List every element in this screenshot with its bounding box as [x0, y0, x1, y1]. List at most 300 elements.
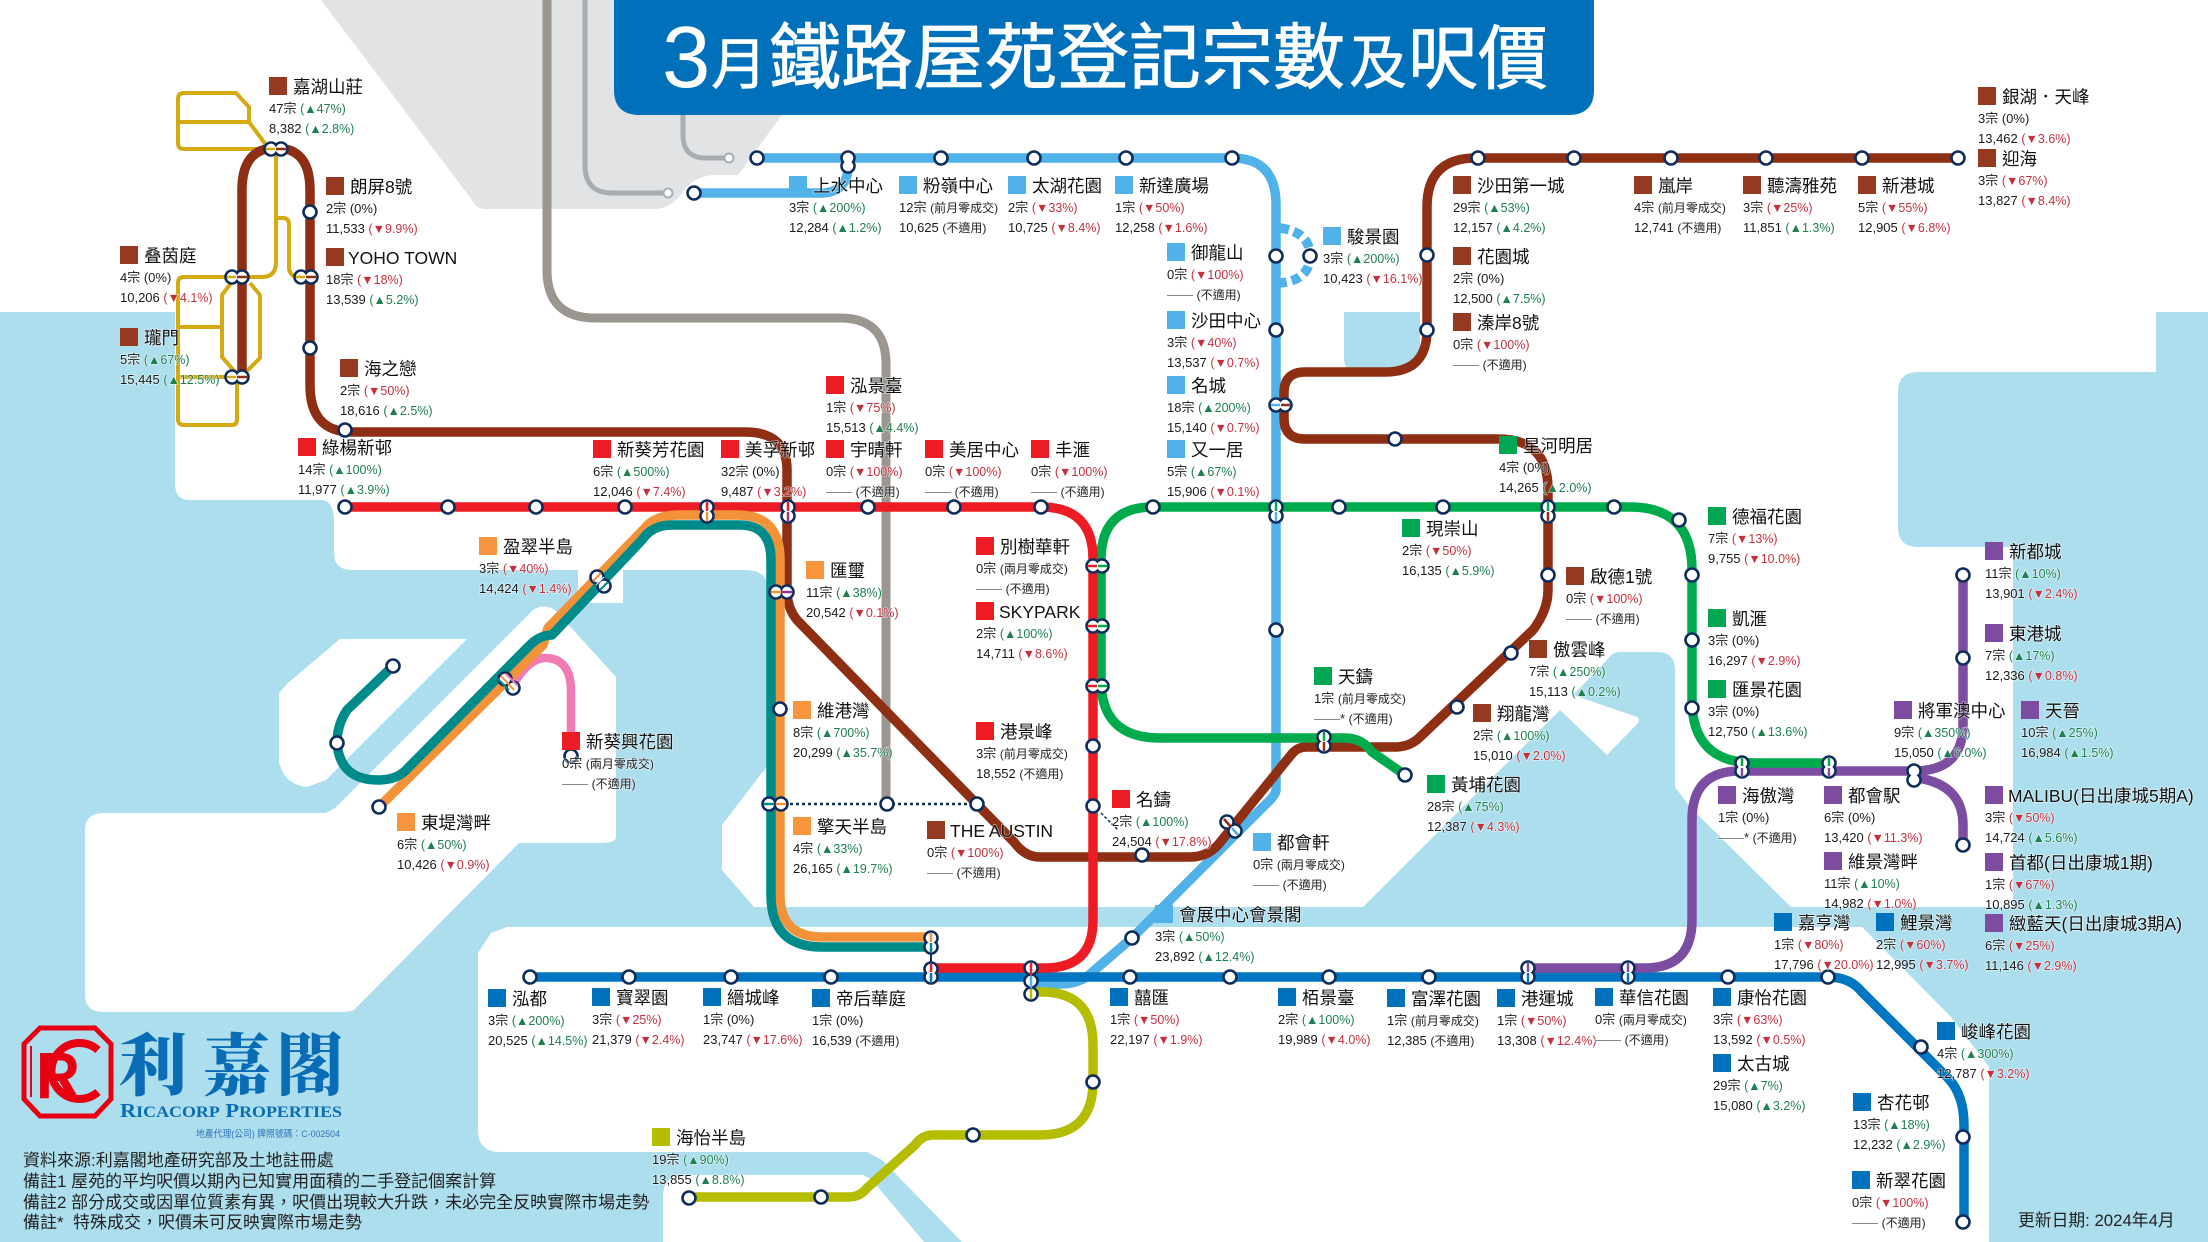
station: 別樹華軒: 0宗 (兩月零成交) — [976, 561, 1068, 576]
station: 星河明居: 星河明居 — [1523, 436, 1593, 456]
station: 都會駅: 13,420 (▼11.3%) — [1824, 830, 1923, 845]
station: 叠茵庭: 10,206 (▼4.1%) — [120, 290, 213, 305]
station: 寶翠園 — [592, 988, 685, 1047]
station: 海之戀: 18,616 (▲2.5%) — [340, 403, 433, 418]
station: 聽濤雅苑: 3宗 (▼25%) — [1743, 200, 1813, 215]
station: 名城: 18宗 (▲200%) — [1167, 400, 1251, 415]
station: 綠楊新邨: 11,977 (▲3.9%) — [298, 482, 390, 497]
station: 迎海: 3宗 (▼67%) — [1978, 173, 2048, 188]
station: 港運城: 13,308 (▼12.4%) — [1497, 1033, 1597, 1048]
station: 新都城: 13,901 (▼2.4%) — [1985, 586, 2078, 601]
station: 叠茵庭 — [120, 246, 213, 305]
station: 翔龍灣: 2宗 (▲100%) — [1473, 728, 1550, 743]
station: 現崇山: 16,135 (▲5.9%) — [1402, 563, 1495, 578]
station: 帝后華庭: 16,539 (不適用) — [812, 1033, 899, 1048]
station: 會展中心會景閣 — [1155, 905, 1302, 964]
line: Tsuen Wan — [345, 507, 1093, 968]
station: 別樹華軒: —— (不適用) — [976, 581, 1050, 596]
station: 御龍山: —— (不適用) — [1167, 287, 1241, 302]
station: 海之戀: 海之戀 — [364, 359, 416, 379]
station: 新達廣場: 12,258 (▼1.6%) — [1115, 220, 1208, 235]
station: 太湖花園: 太湖花園 — [1032, 176, 1102, 196]
station: 天鑄: 1宗 (前月零成交) — [1314, 691, 1406, 706]
station: 緻藍天: 6宗 (▼25%) — [1985, 938, 2055, 953]
station: 海之戀 — [340, 359, 433, 418]
source and footnotes: 備註1 屋苑的平均呎價以期內已知實用面積的二手登記個案計算 — [23, 1171, 496, 1191]
interchange: Yau Tong — [1736, 756, 1748, 778]
station: 匯景花園: 12,750 (▲13.6%) — [1708, 724, 1808, 739]
station: 港景峰 — [976, 722, 1068, 781]
interchange: Austin — [880, 798, 894, 810]
station: 天晉: 16,984 (▲1.5%) — [2021, 745, 2114, 760]
station: 維港灣: 8宗 (▲700%) — [793, 725, 870, 740]
station: 丰滙: —— (不適用) — [1031, 484, 1105, 499]
station: 富澤花園: 1宗 (前月零成交) — [1387, 1013, 1479, 1028]
interchange: Lai King — [700, 500, 714, 522]
interchange: Tuen Mun north — [264, 142, 288, 156]
station: 縉城峰: 縉城峰 — [727, 988, 780, 1008]
station: 栢景臺: 19,989 (▼4.0%) — [1278, 1032, 1371, 1047]
interchange: Central — [924, 962, 938, 984]
station: 粉嶺中心: 粉嶺中心 — [923, 176, 993, 196]
station: 栢景臺: 2宗 (▲100%) — [1278, 1012, 1355, 1027]
station: 黃埔花園: 12,387 (▼4.3%) — [1427, 819, 1520, 834]
station: 凱滙: 凱滙 — [1732, 609, 1767, 629]
station: 華信花園: —— (不適用) — [1595, 1032, 1669, 1047]
station: 會展中心會景閣: 3宗 (▲50%) — [1155, 929, 1225, 944]
station: 丰滙: 0宗 (▼100%) — [1031, 464, 1108, 479]
station: 匯景花園 — [1708, 680, 1808, 739]
station: 啟德1號: —— (不適用) — [1566, 611, 1640, 626]
station: 粉嶺中心: 12宗 (前月零成交) — [899, 200, 998, 215]
station: 名城: 15,140 (▼0.7%) — [1167, 420, 1260, 435]
station: 寶翠園: 3宗 (▼25%) — [592, 1012, 662, 1027]
station: 新達廣場 — [1115, 176, 1209, 235]
station: 嵐岸: 4宗 (前月零成交) — [1634, 200, 1726, 215]
station: 緻藍天: 11,146 (▼2.9%) — [1985, 958, 2077, 973]
station: 宇晴軒: 0宗 (▼100%) — [826, 464, 903, 479]
grey lines — [547, 0, 886, 804]
station: 囍匯 — [1110, 988, 1203, 1047]
station: 德福花園: 7宗 (▼13%) — [1708, 531, 1778, 546]
station: 康怡花園: 康怡花園 — [1737, 988, 1807, 1008]
station: 港運城: 港運城 — [1521, 989, 1574, 1009]
station: 美孚新邨: 美孚新邨 — [745, 440, 815, 460]
small grey terminals — [664, 154, 734, 198]
station: 溱岸8號: —— (不適用) — [1453, 357, 1527, 372]
station: 美孚新邨: 32宗 (0%) — [721, 464, 780, 479]
station: 美居中心: 美居中心 — [949, 440, 1019, 460]
station: MALIBU: 14,724 (▲5.6%) — [1985, 830, 2078, 845]
station: YOHO TOWN — [326, 248, 457, 307]
station: 沙田中心: 沙田中心 — [1191, 311, 1261, 331]
station: 星河明居 — [1499, 436, 1593, 495]
station: 都會駅 — [1824, 786, 1923, 845]
station: 德福花園: 9,755 (▼10.0%) — [1708, 551, 1800, 566]
station: 花園城 — [1453, 247, 1546, 306]
station: 新葵芳花園: 新葵芳花園 — [617, 440, 704, 460]
station: 御龍山 — [1167, 243, 1244, 302]
station: 峻峰花園 — [1937, 1022, 2031, 1081]
station: 天鑄: 天鑄 — [1338, 667, 1373, 687]
station: 綠楊新邨: 綠楊新邨 — [322, 438, 392, 458]
station: 名鑄: 名鑄 — [1136, 790, 1171, 810]
station: MALIBU: 3宗 (▼50%) — [1985, 810, 2055, 825]
station: 港景峰: 18,552 (不適用) — [976, 766, 1063, 781]
station: 天晉 — [2021, 701, 2114, 760]
station: 啟德1號: 啟德1號 — [1590, 567, 1652, 587]
line: Disneyland — [514, 658, 571, 735]
station: 叠茵庭: 叠茵庭 — [144, 246, 196, 266]
station: 海怡半島: 海怡半島 — [676, 1128, 746, 1148]
station: 上水中心: 12,284 (▲1.2%) — [789, 220, 882, 235]
station: 首都: 首都(日出康城1期) — [2009, 853, 2153, 873]
station: 新葵興花園 — [562, 732, 674, 791]
station: 太湖花園: 10,725 (▼8.4%) — [1008, 220, 1101, 235]
station: 鯉景灣 — [1876, 913, 1969, 972]
source and footnotes: 備註* 特殊成交，呎價未可反映實際市場走勢 — [23, 1213, 362, 1232]
station: 新港城: 5宗 (▼55%) — [1858, 200, 1928, 215]
station: 德福花園: 德福花園 — [1732, 507, 1802, 527]
station: 聽濤雅苑: 聽濤雅苑 — [1767, 176, 1837, 196]
water: inland pond — [1344, 312, 1420, 372]
station: 東港城: 12,336 (▼0.8%) — [1985, 668, 2078, 683]
station: 新達廣場: 新達廣場 — [1139, 176, 1209, 196]
station: 鯉景灣: 12,995 (▼3.7%) — [1876, 957, 1969, 972]
railway lines — [242, 148, 1964, 1222]
station: 太古城: 29宗 (▲7%) — [1713, 1078, 1783, 1093]
station: 匯璽 — [806, 561, 899, 620]
station: 新翠花園: 0宗 (▼100%) — [1852, 1195, 1929, 1210]
line: East Rail — [694, 158, 1310, 984]
interchange: Tsing Yi north — [590, 570, 610, 592]
station: 銀湖‧天峰 — [1978, 87, 2090, 146]
station: 東堤灣畔: 6宗 (▲50%) — [397, 837, 467, 852]
interchange: Siu Hong — [226, 270, 248, 284]
station: 富澤花園: 12,385 (不適用) — [1387, 1033, 1474, 1048]
station: 天鑄: ——* (不適用) — [1314, 711, 1393, 726]
station: 維港灣 — [793, 701, 893, 760]
station: 新港城: 新港城 — [1882, 176, 1934, 196]
station: 朗屏8號: 11,533 (▼9.9%) — [326, 221, 418, 236]
title banner: 及 — [1349, 31, 1407, 96]
station: 上水中心 — [789, 176, 883, 235]
station: 迎海: 迎海 — [2002, 149, 2037, 169]
station: 嘉亨灣: 1宗 (▼80%) — [1774, 937, 1844, 952]
station: 囍匯: 1宗 (▼50%) — [1110, 1012, 1180, 1027]
station: 將軍澳中心: 將軍澳中心 — [1918, 701, 2006, 721]
station: 瓏門: 瓏門 — [144, 328, 179, 348]
station: THE AUSTIN — [927, 821, 1053, 880]
station: 現崇山: 2宗 (▼50%) — [1402, 543, 1472, 558]
station: 沙田中心 — [1167, 311, 1261, 370]
station: 帝后華庭: 1宗 (0%) — [812, 1013, 863, 1028]
station: 杏花邨 — [1853, 1093, 1946, 1152]
station: 新葵興花園: —— (不適用) — [562, 776, 636, 791]
station: 維景灣畔: 11宗 (▲10%) — [1824, 876, 1900, 891]
station: 上水中心: 上水中心 — [813, 176, 883, 196]
station: 上水中心: 3宗 (▲200%) — [789, 200, 866, 215]
station: 名城 — [1167, 376, 1260, 435]
station: 凱滙 — [1708, 609, 1801, 668]
interchange: Hong Kong station — [924, 932, 938, 954]
interchange: Tuen Mun — [226, 370, 248, 384]
station: 星河明居: 14,265 (▲2.0%) — [1499, 480, 1592, 495]
station: 擎天半島: 4宗 (▲33%) — [793, 841, 863, 856]
station: 帝后華庭 — [812, 989, 906, 1048]
station: 首都 — [1985, 853, 2153, 912]
interchange: Tseung Kwan O — [1908, 764, 1920, 786]
station: 首都: 10,895 (▲1.3%) — [1985, 897, 2078, 912]
station: 泓景臺: 泓景臺 — [850, 376, 902, 396]
station: 都會軒 — [1253, 833, 1345, 892]
station: 海傲灣: ——* (不適用) — [1718, 830, 1797, 845]
interchange: Sheung Shui — [842, 152, 854, 172]
station: 鯉景灣: 鯉景灣 — [1900, 913, 1952, 933]
station: SKYPARK — [976, 602, 1081, 661]
interchange: Yuen Long — [294, 270, 318, 284]
title banner: 鐵路屋苑登記宗數 — [769, 19, 1345, 99]
station: 杏花邨: 杏花邨 — [1877, 1093, 1930, 1113]
station: 鯉景灣: 2宗 (▼60%) — [1876, 937, 1946, 952]
station: 縉城峰 — [703, 988, 803, 1047]
station: 匯景花園: 3宗 (0%) — [1708, 704, 1759, 719]
station: 栢景臺: 栢景臺 — [1302, 988, 1354, 1008]
station: 銀湖‧天峰: 銀湖．天峰 — [2002, 87, 2090, 107]
station: 盈翠半島: 3宗 (▼40%) — [479, 561, 549, 576]
station: 東堤灣畔: 10,426 (▼0.9%) — [397, 857, 490, 872]
station: 泓景臺 — [826, 376, 919, 435]
station: YOHO TOWN: 13,539 (▲5.2%) — [326, 292, 419, 307]
station: 將軍澳中心 — [1894, 701, 2006, 760]
station: 海怡半島 — [652, 1128, 746, 1187]
station: 都會軒: —— (不適用) — [1253, 877, 1327, 892]
station: 瓏門: 15,445 (▲12.5%) — [120, 372, 220, 387]
station: THE AUSTIN: —— (不適用) — [927, 865, 1001, 880]
station: 朗屏8號 — [326, 177, 418, 236]
station: 現崇山 — [1402, 519, 1495, 578]
station: 康怡花園: 13,592 (▼0.5%) — [1713, 1032, 1806, 1047]
station: 匯景花園: 匯景花園 — [1732, 680, 1802, 700]
logo English name: RICACORP PROPERTIES — [120, 1100, 342, 1122]
station: 海怡半島: 19宗 (▲90%) — [652, 1152, 729, 1167]
station: 德福花園 — [1708, 507, 1802, 566]
station: 粉嶺中心: 10,625 (不適用) — [899, 220, 986, 235]
station: 嘉亨灣 — [1774, 913, 1874, 972]
interchange: Hung Hom — [1220, 816, 1242, 838]
line: Tung Chung — [379, 515, 931, 937]
station: 新葵芳花園: 12,046 (▼7.4%) — [593, 484, 686, 499]
station: SKYPARK: 2宗 (▲100%) — [976, 626, 1053, 641]
station: 泓景臺: 15,513 (▲4.4%) — [826, 420, 919, 435]
station: 翔龍灣: 翔龍灣 — [1497, 704, 1550, 724]
station: 杏花邨: 13宗 (▲18%) — [1853, 1117, 1930, 1132]
link between interchange stations — [930, 950, 932, 962]
station: 港運城: 1宗 (▼50%) — [1497, 1013, 1567, 1028]
station: 嘉湖山莊: 8,382 (▲2.8%) — [269, 121, 354, 136]
station: 嘉湖山莊: 47宗 (▲47%) — [269, 101, 346, 116]
station: 又一居: 又一居 — [1191, 440, 1244, 460]
station: 新都城: 11宗 (▲10%) — [1985, 566, 2061, 581]
interchange: Prince Edward — [1086, 560, 1108, 572]
station: 緻藍天 — [1985, 914, 2182, 973]
station: 都會駅: 都會駅 — [1848, 786, 1900, 806]
station: YOHO TOWN: 18宗 (▼18%) — [326, 272, 403, 287]
station: 富澤花園: 富澤花園 — [1411, 989, 1481, 1009]
station: 天晉: 10宗 (▲25%) — [2021, 725, 2098, 740]
interchange: Kowloon — [762, 798, 788, 810]
station: 別樹華軒: 別樹華軒 — [1000, 537, 1070, 557]
station: 都會軒: 0宗 (兩月零成交) — [1253, 857, 1345, 872]
light rail network — [178, 93, 299, 425]
station: 維景灣畔 — [1824, 852, 1918, 911]
station: 華信花園: 0宗 (兩月零成交) — [1595, 1012, 1687, 1027]
station: SKYPARK: SKYPARK — [999, 602, 1081, 622]
station: 名城: 名城 — [1191, 376, 1226, 396]
station: 現崇山: 現崇山 — [1426, 519, 1478, 539]
station: 名鑄: 2宗 (▲100%) — [1112, 814, 1189, 829]
dashed link at Kowloon — [784, 803, 977, 805]
station: 泓都: 20,525 (▲14.5%) — [488, 1033, 588, 1048]
station: 嘉亨灣: 嘉亨灣 — [1798, 913, 1850, 933]
station: 華信花園: 華信花園 — [1619, 988, 1689, 1008]
station: 囍匯: 22,197 (▼1.9%) — [1110, 1032, 1203, 1047]
station: 海之戀: 2宗 (▼50%) — [340, 383, 410, 398]
station: 翔龍灣: 15,010 (▼2.0%) — [1473, 748, 1566, 763]
station: 維景灣畔: 14,982 (▼1.0%) — [1824, 896, 1917, 911]
interchange: Admiralty — [1024, 962, 1038, 1000]
station: 傲雲峰: 15,113 (▲0.2%) — [1529, 684, 1621, 699]
station: 新都城: 新都城 — [2009, 542, 2062, 562]
station: 太古城 — [1713, 1054, 1806, 1113]
station: 帝后華庭: 帝后華庭 — [836, 989, 906, 1009]
station: 翔龍灣 — [1473, 704, 1566, 763]
station: 擎天半島 — [793, 817, 893, 876]
station: 傲雲峰: 傲雲峰 — [1553, 640, 1606, 660]
station: 擎天半島: 擎天半島 — [817, 817, 887, 837]
station: 匯璽: 11宗 (▲38%) — [806, 585, 882, 600]
station: 新葵芳花園 — [593, 440, 704, 499]
station: MALIBU: MALIBU(日出康城5期A) — [2008, 786, 2194, 806]
station: 擎天半島: 26,165 (▲19.7%) — [793, 861, 893, 876]
station: 東港城 — [1985, 624, 2078, 683]
station: 東堤灣畔: 東堤灣畔 — [421, 813, 491, 833]
interchange: Ho Man Tin — [1318, 730, 1330, 752]
interchange: North Point — [1522, 962, 1534, 984]
station: 名鑄 — [1112, 790, 1212, 849]
station: 迎海 — [1978, 149, 2071, 208]
line: Airport Express — [337, 525, 931, 947]
station: 黃埔花園: 黃埔花園 — [1451, 775, 1521, 795]
station: 港景峰: 3宗 (前月零成交) — [976, 746, 1068, 761]
station: 朗屏8號: 朗屏8號 — [350, 177, 412, 197]
station: 駿景園: 駿景園 — [1347, 227, 1400, 247]
station: 叠茵庭: 4宗 (0%) — [120, 270, 171, 285]
station: 維港灣: 維港灣 — [817, 701, 870, 721]
station: 綠楊新邨: 14宗 (▲100%) — [298, 462, 382, 477]
station: 凱滙: 16,297 (▼2.9%) — [1708, 653, 1801, 668]
station: 新翠花園 — [1852, 1171, 1946, 1230]
station: 美孚新邨: 9,487 (▼3.2%) — [721, 484, 806, 499]
title banner: 月 — [711, 33, 767, 96]
station: 黃埔花園: 28宗 (▲75%) — [1427, 799, 1504, 814]
station: 瓏門 — [120, 328, 220, 387]
source and footnotes: 備註2 部分成交或因單位質素有異，呎價出現較大升跌，未必完全反映實際市場走勢 — [23, 1193, 649, 1212]
station: 嵐岸: 嵐岸 — [1658, 176, 1693, 196]
station: 花園城: 2宗 (0%) — [1453, 271, 1504, 286]
station: 海怡半島: 13,855 (▲8.8%) — [652, 1172, 745, 1187]
station: 首都: 1宗 (▼67%) — [1985, 877, 2055, 892]
station: 美孚新邨 — [721, 440, 815, 499]
station: 迎海: 13,827 (▼8.4%) — [1978, 193, 2071, 208]
station: 海傲灣: 1宗 (0%) — [1718, 810, 1769, 825]
logo emblem letter: R — [36, 1038, 80, 1112]
station: 都會軒: 都會軒 — [1277, 833, 1330, 853]
title banner: 3 — [662, 9, 710, 106]
station: 瓏門: 5宗 (▲67%) — [120, 352, 190, 367]
stations — [304, 152, 1970, 1228]
logo emblem — [24, 1028, 111, 1116]
station: 栢景臺 — [1278, 988, 1371, 1047]
station: 新都城 — [1985, 542, 2078, 601]
station: 嵐岸 — [1634, 176, 1726, 235]
station: 別樹華軒 — [976, 537, 1070, 596]
station: 沙田第一城 — [1453, 176, 1564, 235]
station: 華信花園 — [1595, 988, 1689, 1047]
logo: Ricacorp Properties — [24, 1013, 344, 1140]
station: 緻藍天: 緻藍天(日出康城3期A) — [2009, 914, 2182, 934]
station: 新翠花園: —— (不適用) — [1852, 1215, 1926, 1230]
station: 又一居 — [1167, 440, 1260, 499]
station: 峻峰花園: 12,787 (▼3.2%) — [1937, 1066, 2030, 1081]
station: 天晉: 天晉 — [2045, 701, 2080, 721]
station: 將軍澳中心: 9宗 (▲350%) — [1894, 725, 1971, 740]
station: 盈翠半島: 14,424 (▼1.4%) — [479, 581, 572, 596]
line: Tuen Ma — [242, 148, 1958, 857]
station: 凱滙: 3宗 (0%) — [1708, 633, 1759, 648]
station: 泓都: 3宗 (▲200%) — [488, 1013, 565, 1028]
station: 泓景臺: 1宗 (▼75%) — [826, 400, 896, 415]
interchange: Nam Cheong — [770, 586, 794, 598]
station: 朗屏8號: 2宗 (0%) — [326, 201, 377, 216]
line: South Island — [689, 992, 1093, 1197]
station: 嘉湖山莊: 嘉湖山莊 — [293, 77, 363, 97]
station: 會展中心會景閣: 23,892 (▲12.4%) — [1155, 949, 1255, 964]
station: 新葵興花園: 0宗 (兩月零成交) — [562, 756, 654, 771]
station: 名鑄: 24,504 (▼17.8%) — [1112, 834, 1212, 849]
station: 康怡花園 — [1713, 988, 1807, 1047]
station: 丰滙 — [1031, 440, 1108, 499]
station: 綠楊新邨 — [298, 438, 392, 497]
station: 黃埔花園 — [1427, 775, 1521, 834]
interchange stations — [226, 142, 1920, 1000]
station: 星河明居: 4宗 (0%) — [1499, 460, 1550, 475]
station: 寶翠園: 寶翠園 — [616, 988, 668, 1008]
station: 東港城: 7宗 (▲17%) — [1985, 648, 2055, 663]
station: 又一居: 15,906 (▼0.1%) — [1167, 484, 1260, 499]
station: 御龍山: 御龍山 — [1191, 243, 1244, 263]
station: THE AUSTIN: THE AUSTIN — [950, 821, 1053, 841]
interchange: Tai Wai — [1270, 398, 1292, 412]
leader for 名鑄 — [1101, 813, 1118, 830]
station: 新達廣場: 1宗 (▼50%) — [1115, 200, 1185, 215]
station: 康怡花園: 3宗 (▼63%) — [1713, 1012, 1783, 1027]
station: 沙田第一城: 沙田第一城 — [1477, 176, 1564, 196]
station: 溱岸8號 — [1453, 313, 1539, 372]
station: 傲雲峰: 7宗 (▲250%) — [1529, 664, 1606, 679]
station: 泓都: 泓都 — [512, 989, 547, 1009]
station: 新港城: 12,905 (▼6.8%) — [1858, 220, 1951, 235]
